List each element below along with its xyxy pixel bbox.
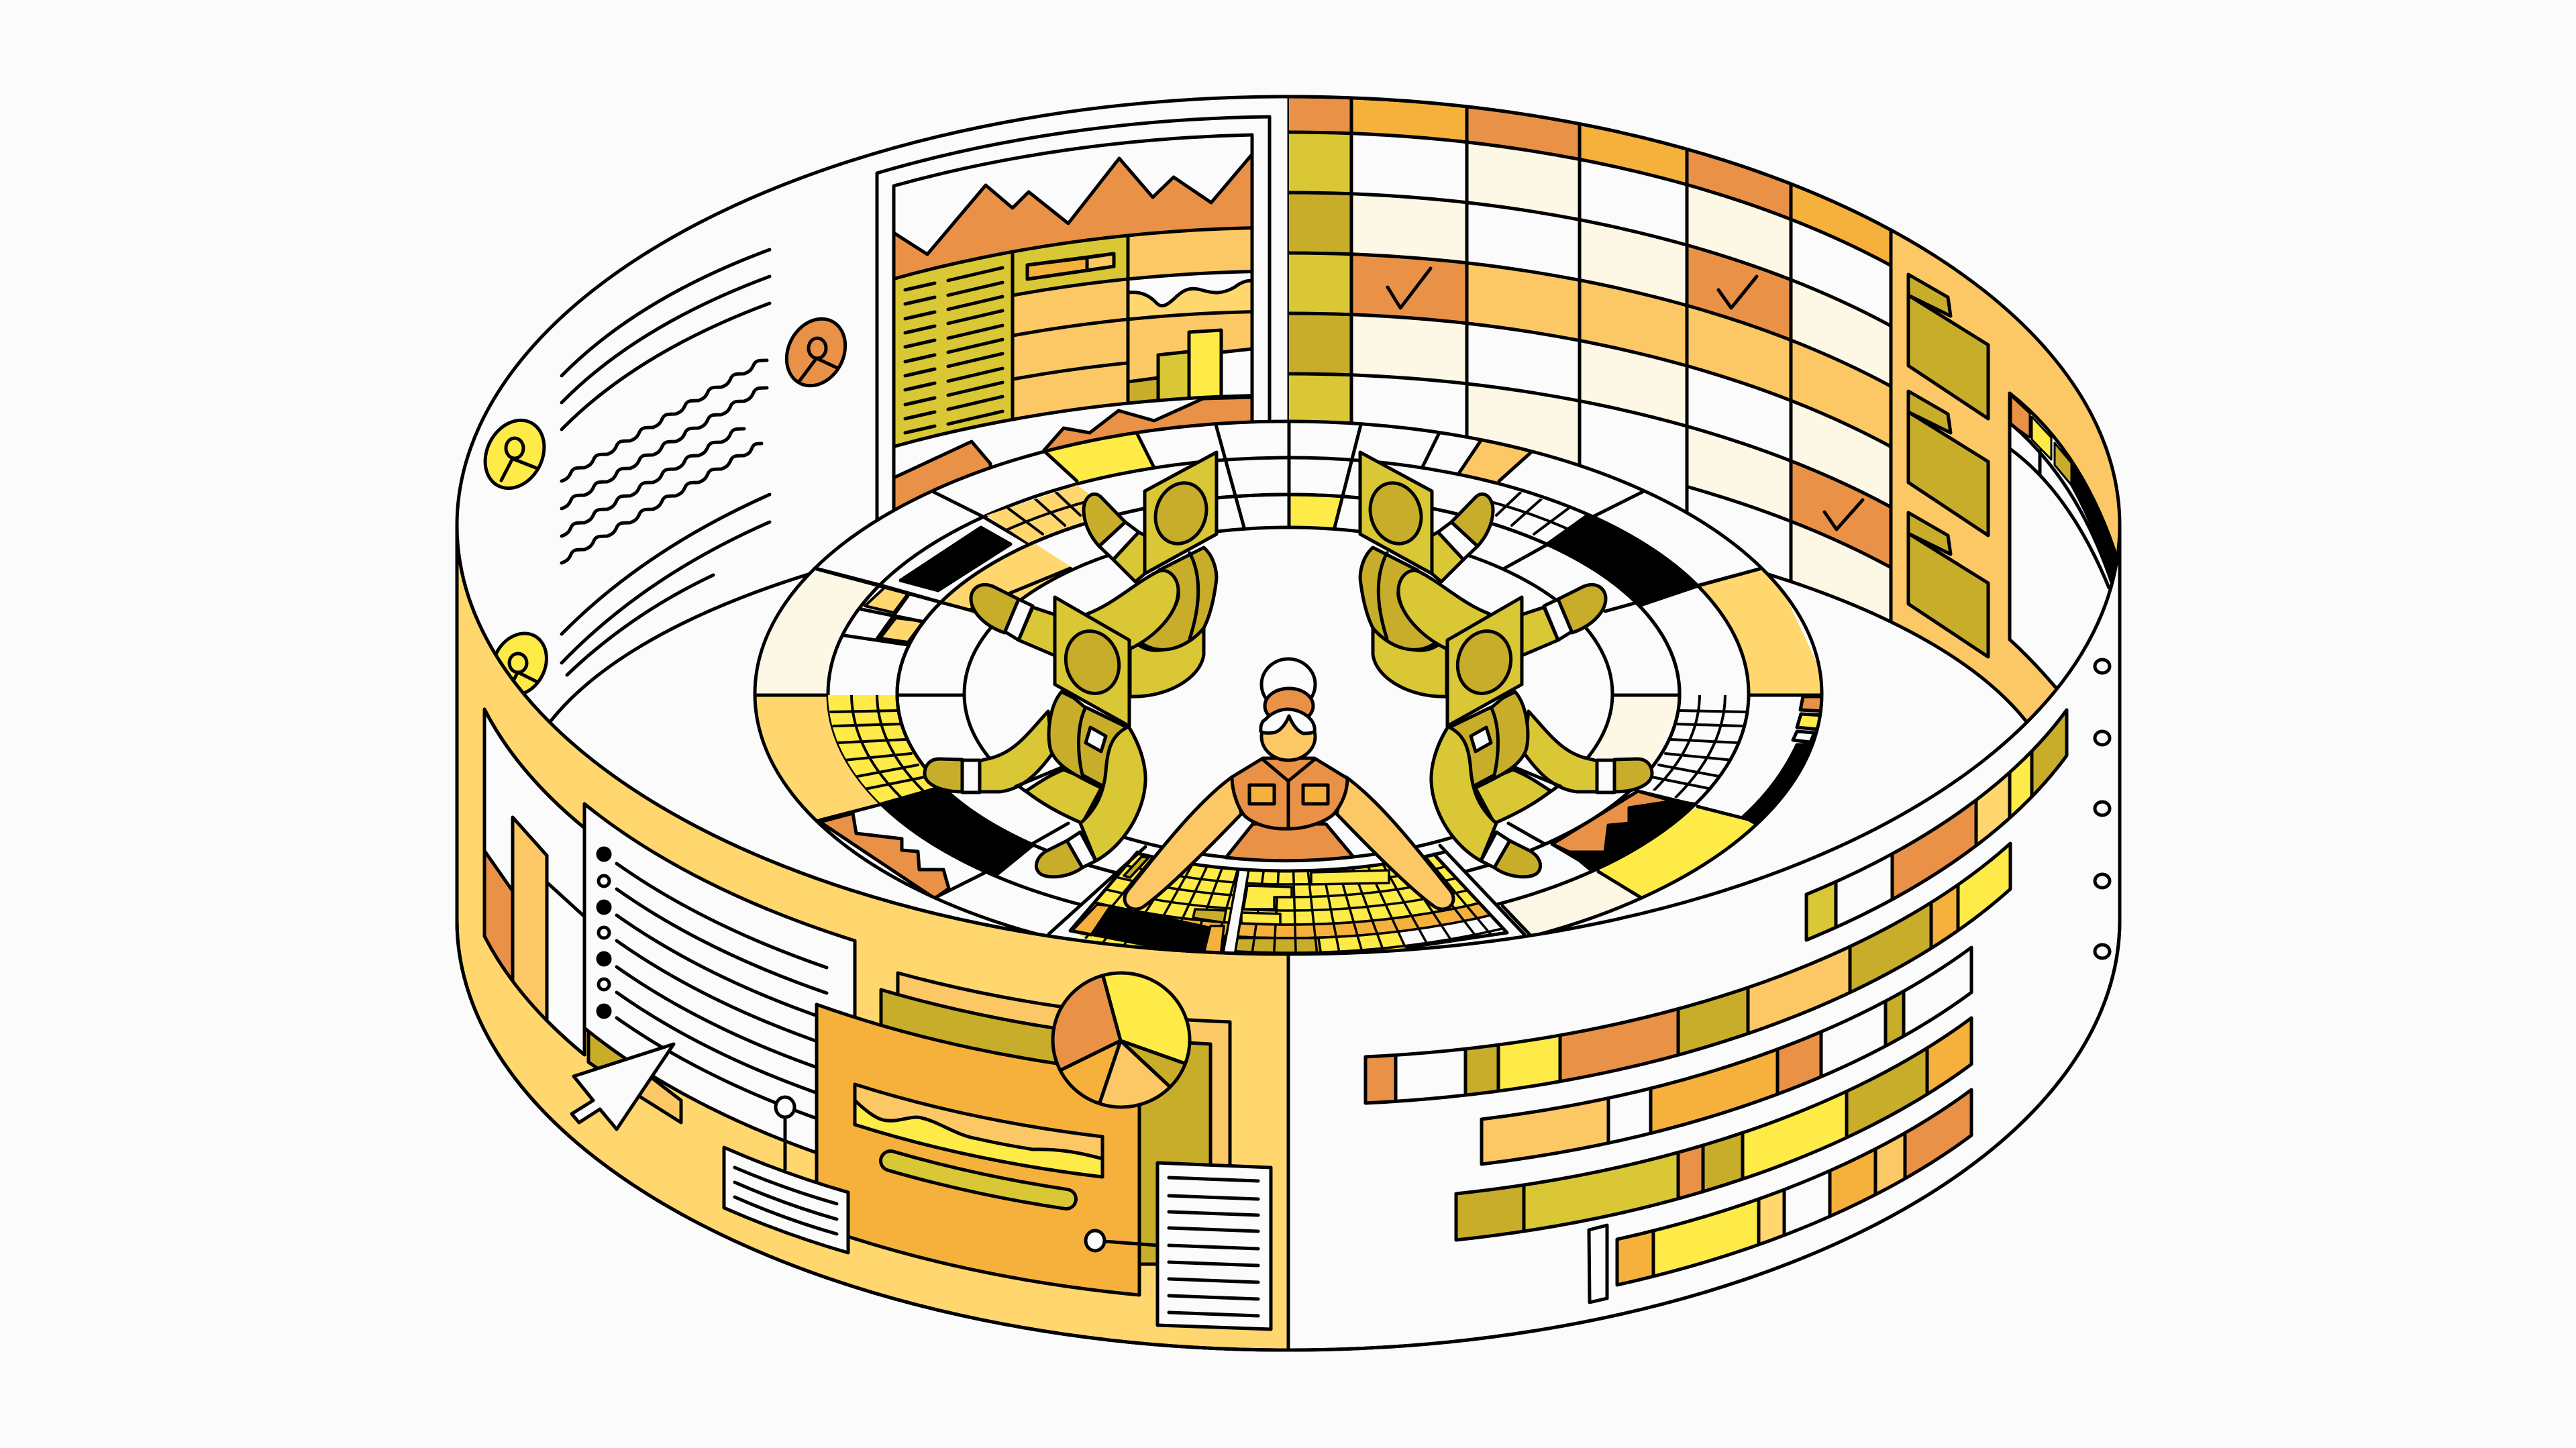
- wavy lines: [562, 360, 767, 563]
- frame lines: [877, 97, 1289, 537]
- cylinder outline: [457, 525, 2120, 1350]
- icon: yellow pin lower: [495, 632, 548, 694]
- timeline bar 2: [1363, 841, 2012, 1104]
- panel: floor ring inner: [817, 421, 1759, 893]
- small note card: [724, 1147, 848, 1253]
- arm left: [1125, 777, 1241, 909]
- back sheet peach: [898, 973, 1230, 1168]
- grid: yellow lower left: [805, 470, 1725, 918]
- panel: right outer wall: [1366, 660, 2110, 1308]
- folder 1: [1908, 274, 1988, 419]
- folder 3: [1908, 513, 1988, 657]
- figure: central person: [1125, 659, 1453, 909]
- text document: [1157, 1163, 1271, 1329]
- cells upper left: [865, 587, 908, 613]
- text lines top: [562, 250, 770, 429]
- pie chart: [1051, 972, 1192, 1108]
- table: back wall spreadsheet: [457, 67, 2120, 1292]
- bar chart window: [484, 709, 584, 1055]
- center well: [964, 527, 1612, 860]
- timeline bar 4: [1455, 1016, 1973, 1241]
- vest: [1232, 758, 1347, 829]
- small white tag: [1589, 1225, 1607, 1302]
- panel: floor ring middle: [805, 458, 1749, 930]
- panel: right wall folders strip: [1891, 67, 2127, 805]
- panel: cylinder interior: [459, 98, 2118, 953]
- icon: yellow pin top: [483, 419, 546, 490]
- panel: left wall notes: [474, 250, 857, 705]
- hat: [1265, 688, 1313, 723]
- connector dots: [776, 1097, 1157, 1251]
- radial spokes: [817, 421, 1759, 611]
- figure: astronaut upper right: [1360, 452, 1606, 696]
- grid: white lower right: [852, 470, 1746, 918]
- hair: [1261, 709, 1315, 733]
- timeline bar 3: [1480, 946, 1973, 1166]
- black segments: [872, 786, 1037, 886]
- cursor arrow: [572, 1044, 674, 1129]
- text lines bottom: [562, 495, 770, 675]
- panel: front grid keyboard: [781, 435, 1796, 980]
- arm right: [1337, 777, 1453, 909]
- merged cells: [1311, 870, 1389, 884]
- panel: floor ring outer: [738, 419, 1839, 966]
- figure: astronaut lower right: [1431, 597, 1652, 877]
- skirt: [1226, 824, 1353, 861]
- top rim: [457, 97, 2120, 954]
- wall base curve: [517, 509, 2060, 1109]
- icon: check marks: [1388, 268, 1863, 529]
- card behind list: [588, 1027, 681, 1123]
- panel: back wall dashboard frame: [875, 98, 1289, 519]
- face: [1261, 713, 1315, 760]
- grid: light yellow upper left: [986, 485, 1088, 544]
- icon: orange pin: [785, 317, 847, 388]
- timeline bar 5: [1616, 1088, 1973, 1287]
- side window: [2010, 393, 2127, 691]
- bulleted document: [584, 804, 855, 1181]
- folder 2: [1908, 391, 1988, 535]
- line chart and dashboard: [895, 154, 1251, 507]
- center seam: [1287, 954, 1290, 1350]
- cylinder body: [457, 525, 2120, 1350]
- amber report card: [817, 1004, 1139, 1295]
- figure: astronaut upper left: [971, 452, 1217, 696]
- grid: white upper right: [862, 476, 1715, 912]
- figure: astronaut lower left: [925, 597, 1145, 877]
- halo: [1261, 659, 1315, 710]
- rivet holes: [2095, 660, 2110, 958]
- back sheet olive: [881, 990, 1210, 1264]
- panel: left yellow outer wall: [457, 525, 1288, 1350]
- timeline bar 1: [1805, 709, 2068, 942]
